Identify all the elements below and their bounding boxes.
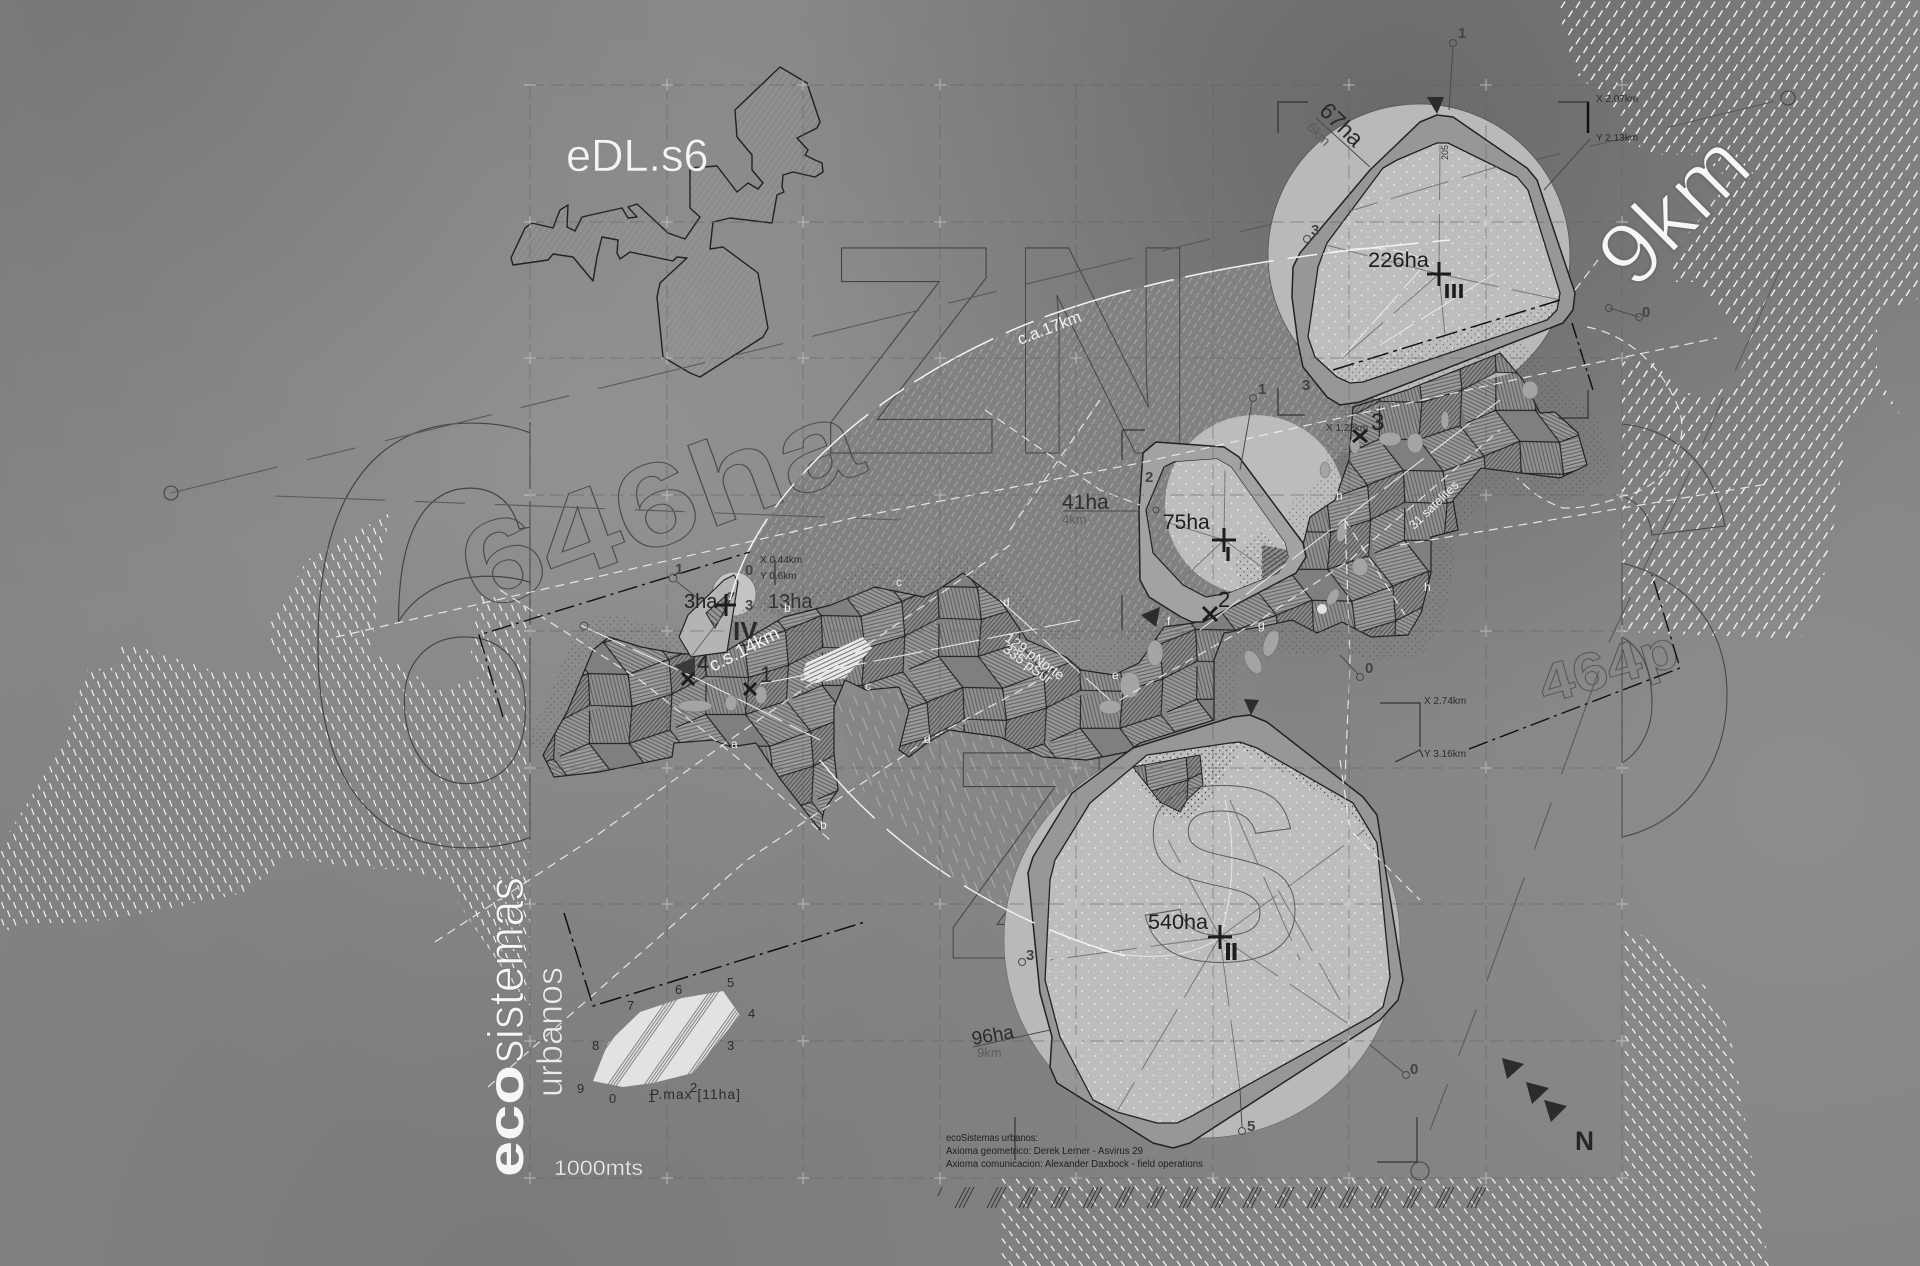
plot II ring — [1028, 715, 1403, 1148]
credits block: ecoSistemas urbanos: — [946, 1133, 1038, 1144]
plot III interior — [1300, 143, 1560, 400]
coordinates Y 0.6km: Y 0.6km — [760, 571, 796, 582]
site number 3: 3 — [1371, 409, 1384, 436]
label c.s.14km: c.s.14km — [706, 623, 783, 676]
dash field: top right — [1560, 0, 1920, 639]
small gray node numbers: 2 — [1145, 469, 1153, 486]
crosses and X markers — [682, 262, 1451, 949]
white mesh node letters: h — [1424, 580, 1431, 594]
site circle II — [1004, 742, 1400, 1138]
hatched ellipse: lower zone — [835, 690, 1110, 912]
distance label 9km: 9km — [1577, 114, 1769, 305]
north letter: N — [1575, 1126, 1594, 1156]
roman numeral III bars — [1447, 284, 1461, 298]
legend polygon numbers: 0 — [609, 1091, 616, 1106]
small gray node numbers: 0 — [1642, 304, 1650, 321]
legend label P.max: P.max [11ha] — [650, 1086, 740, 1102]
dash field: bottom right — [1000, 920, 1770, 1266]
black dash-dot frame lower left — [564, 913, 865, 1006]
big outlined letter S: S — [1138, 734, 1305, 1013]
small gray node numbers: 0 — [1410, 1061, 1418, 1078]
big outlined letters ZN — [822, 183, 1197, 517]
black dash-dot frame upper left — [479, 552, 750, 717]
small gray node numbers: 1 — [1458, 25, 1466, 42]
distance label 6km: 6km — [1304, 119, 1334, 149]
north arrow triangles — [1502, 1058, 1567, 1122]
layout grid with crosses — [524, 79, 1628, 1184]
plot IV triangle marker — [674, 657, 695, 680]
satellites label: 31 satelites — [1406, 478, 1462, 532]
mesh blobs — [678, 381, 1538, 714]
site circle IV — [712, 572, 756, 616]
white mesh node letters: b — [820, 818, 827, 832]
vertical title ecoSistemas: eco — [478, 1065, 534, 1177]
legend polygon numbers: 1 — [648, 1090, 655, 1105]
distance label 4km: 4km — [1062, 512, 1087, 527]
area label 75ha: 75ha — [1163, 511, 1210, 534]
long gray reference lines — [171, 98, 1788, 1130]
small gray node numbers — [675, 25, 1650, 1135]
area label 67ha: 67ha — [1314, 97, 1369, 152]
legend polygon numbers: 3 — [727, 1038, 734, 1053]
site number 4: 4 — [697, 651, 709, 676]
white mesh node letters: a — [731, 737, 738, 751]
plot II interior — [1045, 735, 1390, 1123]
area label 13ha: 13ha — [768, 591, 813, 613]
tick marks strip — [938, 1187, 1486, 1208]
coordinates Y 2.13km: Y 2.13km — [1596, 133, 1638, 144]
plot I ring — [1139, 442, 1306, 622]
white mesh node letters: d — [1003, 595, 1010, 609]
coordinates X 2.74km: X 2.74km — [1424, 696, 1466, 707]
outlined label 464p: 464p — [1532, 619, 1685, 716]
title eDL.s6: eDL.s6 — [566, 130, 709, 181]
credits block: Axioma comunicacion: Alexander Daxbock - field operations — [946, 1159, 1203, 1170]
label 205: 205 — [1440, 145, 1450, 160]
urban mesh territory — [543, 353, 1587, 830]
black dash-dot frame 464p — [1469, 575, 1680, 749]
legend polygon numbers: 5 — [727, 975, 734, 990]
dash field: left — [0, 513, 530, 1007]
site number 1: 1 — [760, 662, 772, 687]
label 335 pSur: 335 pSur — [1000, 640, 1056, 687]
roman numeral I bar — [1226, 547, 1230, 561]
vertical subtitle urbanos: urbanos — [529, 967, 570, 1097]
white mesh node letters: e — [1112, 668, 1119, 682]
area label 41ha: 41ha — [1062, 491, 1109, 514]
reference circles — [164, 91, 1795, 1180]
big outlined letters ZN: Z — [822, 183, 1000, 517]
small gray node numbers: 1 — [675, 561, 683, 578]
legend polygon numbers: 9 — [577, 1081, 584, 1096]
legend polygon numbers: 6 — [675, 982, 682, 997]
area label 3ha: 3ha — [684, 591, 718, 613]
white solid arc c.a.17km — [730, 240, 1450, 600]
small gray node numbers: 0 — [1365, 660, 1373, 677]
distance label 9km small: 9km — [977, 1045, 1002, 1060]
plot III ring — [1292, 115, 1575, 405]
plot IV shape — [679, 575, 738, 657]
credits block — [946, 1133, 1203, 1170]
legend plot polygon — [593, 991, 740, 1087]
plot III dash-dot axis — [1572, 323, 1593, 390]
legend polygon numbers: 7 — [627, 998, 634, 1013]
legend polygon numbers — [577, 975, 755, 1106]
coordinates X 1.22km: X 1.22km — [1326, 423, 1368, 434]
white mesh node letters — [731, 489, 1431, 832]
white lower arc — [820, 760, 1140, 960]
big outlined letters ZN: N — [1008, 184, 1197, 517]
white blob marker — [1317, 604, 1327, 614]
arc label c.a.17km: c.a.17km — [1015, 308, 1084, 349]
dotted halo around mesh — [543, 353, 1587, 755]
white mesh node letters: b — [784, 601, 791, 615]
vertical title ecoSistemas — [478, 877, 534, 1177]
legend polygon numbers: 4 — [748, 1006, 755, 1021]
big outlined number 6, clipped: 6 — [296, 300, 630, 970]
plot I triangle marker — [1141, 607, 1160, 627]
area label 540ha: 540ha — [1148, 911, 1208, 934]
outlined label 646ha: 646ha — [442, 371, 878, 637]
leaf shaped hatched plot — [800, 637, 872, 683]
roman numeral II bars — [1228, 943, 1234, 960]
small gray node numbers: 3 — [1026, 947, 1034, 964]
coordinates X 0.44km: X 0.44km — [760, 555, 802, 566]
right arc shapes — [530, 422, 1727, 840]
site circle I — [1165, 415, 1345, 595]
white mesh node letters: g — [1258, 618, 1265, 632]
area label 226ha: 226ha — [1368, 249, 1429, 272]
scale label 1000mts: 1000mts — [554, 1157, 643, 1180]
white mesh node letters: c — [896, 575, 902, 589]
leader lines and node circles — [580, 40, 1642, 1134]
plot II triangle marker — [1244, 699, 1259, 715]
area label 96ha: 96ha — [970, 1022, 1016, 1050]
white dashed construction lines — [336, 260, 1767, 1087]
small gray node numbers: 5 — [1247, 1118, 1255, 1135]
credits block: Axioma geometrico: Derek Lerner - Asvirus 29 — [946, 1146, 1143, 1157]
legend polygon numbers: 8 — [592, 1038, 599, 1053]
legend polygon numbers: 2 — [690, 1080, 697, 1095]
site number 2: 2 — [1218, 587, 1230, 612]
small gray node numbers: 1 — [1258, 381, 1266, 398]
white mesh node letters: d — [924, 732, 931, 746]
site circle III — [1268, 104, 1570, 406]
coordinates Y 3.16km: Y 3.16km — [1424, 749, 1466, 760]
white mesh node letters: h — [1336, 489, 1343, 503]
label 129 pNorte: 129 pNorte — [1002, 629, 1068, 683]
hatched ellipse: upper zone — [730, 240, 1500, 640]
mesh axis line — [580, 400, 1500, 740]
small gray node numbers: 3 — [1302, 377, 1310, 394]
white mesh node letters: c — [865, 679, 871, 693]
small gray node numbers: 3 — [745, 597, 753, 614]
coordinates X 2.07km: X 2.07km — [1596, 94, 1638, 105]
outline site plan shape — [511, 67, 823, 377]
small gray node numbers: 3 — [1311, 222, 1319, 239]
white mesh node letters: f — [1167, 614, 1171, 628]
corner brackets — [775, 102, 1588, 1162]
big outlined letter Z lower: Z — [945, 688, 1112, 1021]
roman numeral IV: IV — [733, 616, 758, 646]
vertical title ecoSistemas: sistemas — [478, 877, 534, 1063]
plot III triangle marker — [1427, 97, 1444, 114]
plot I interior — [1145, 458, 1289, 598]
small gray node numbers: 0 — [745, 562, 753, 579]
